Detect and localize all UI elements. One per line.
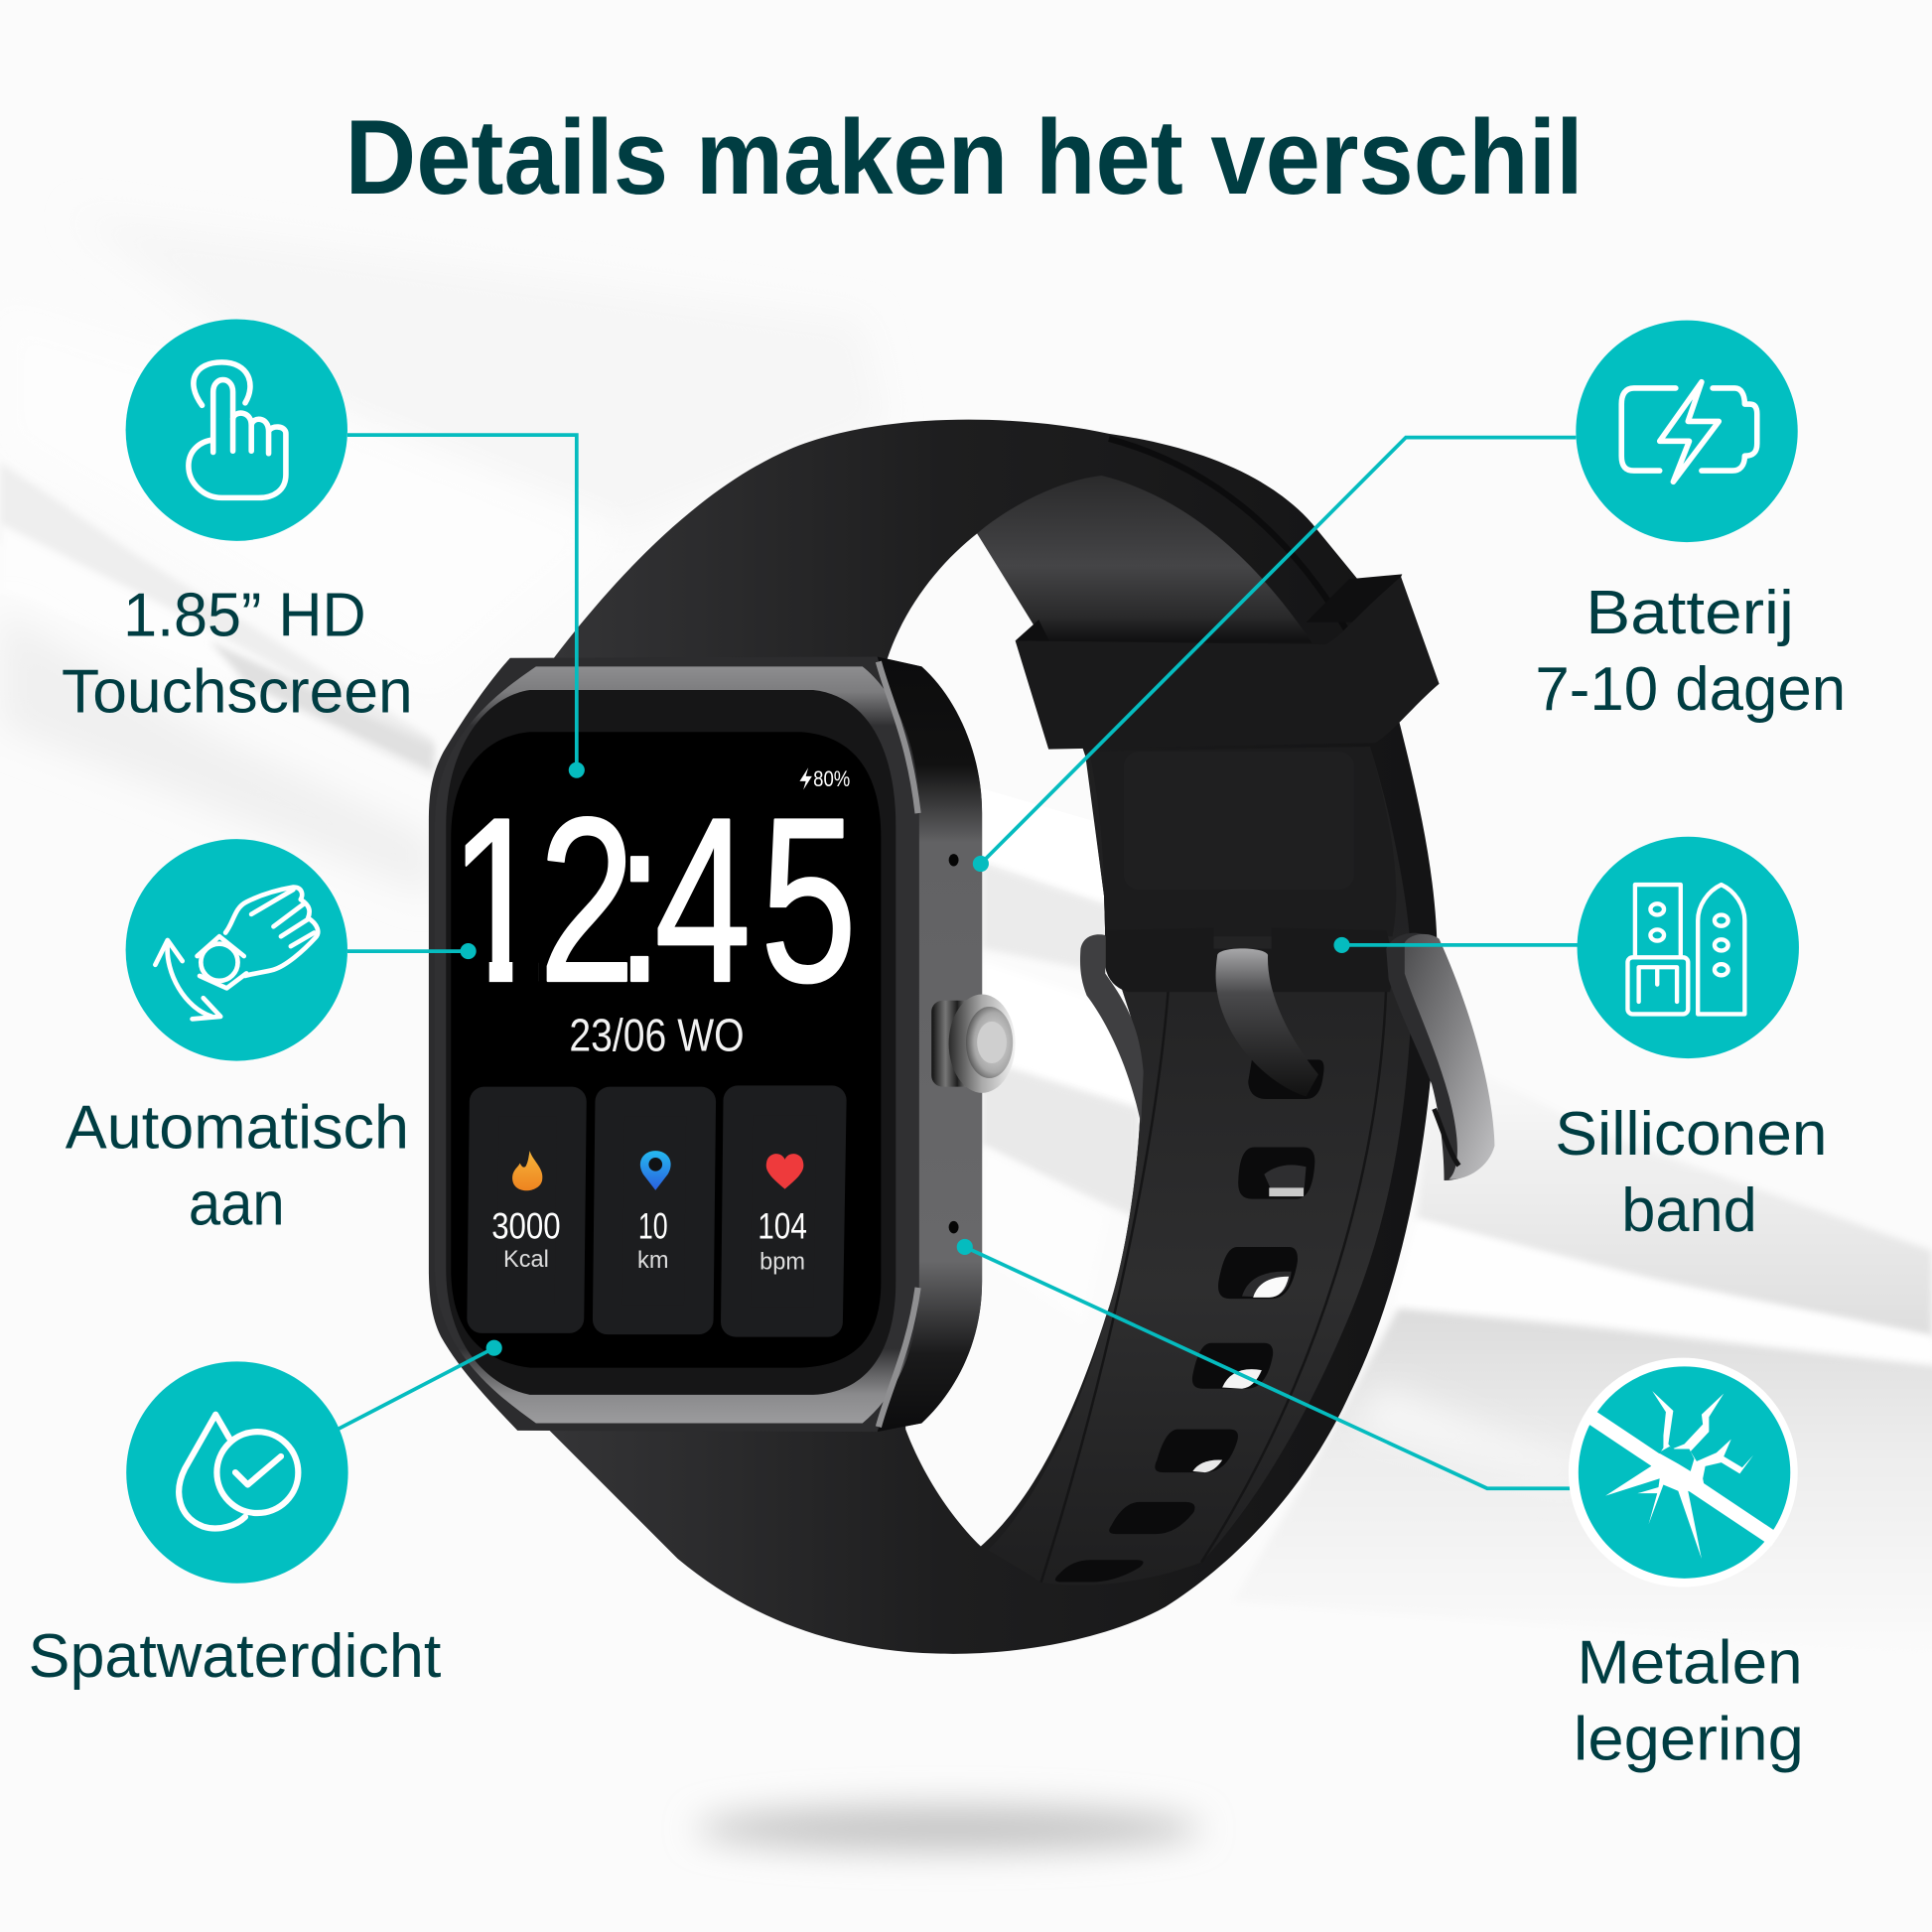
- feature: splash proof: [29, 1361, 441, 1691]
- label: Automatisch: [66, 1094, 409, 1163]
- feature: touchscreen: [62, 319, 413, 726]
- label: 1.85” HD: [123, 581, 366, 649]
- label: Touchscreen: [62, 657, 413, 726]
- label: Batterij: [1586, 579, 1794, 647]
- feature: metal alloy: [1569, 1358, 1804, 1773]
- icon: water drop with check: [179, 1415, 298, 1528]
- label: Metalen: [1578, 1628, 1803, 1697]
- card: heart rate: 104: [758, 1204, 807, 1246]
- battery status: 80%: [813, 766, 850, 791]
- badge: [1576, 321, 1798, 542]
- badge: [126, 319, 347, 541]
- badge: [1578, 837, 1799, 1058]
- badge: [126, 839, 347, 1061]
- keeper loop: [1016, 574, 1402, 642]
- button dots: [949, 854, 959, 1233]
- card: distance: km: [637, 1247, 668, 1273]
- icon: tapping hand: [189, 362, 286, 497]
- screen trim removing the foot of the 1: [454, 961, 538, 988]
- card: distance: 10: [638, 1204, 668, 1246]
- card: calories: 3000: [491, 1204, 561, 1246]
- silver highlights: [879, 661, 918, 1427]
- callout: automatic wake connector: [347, 943, 477, 959]
- card: distance: [608, 1102, 701, 1319]
- label: [62, 581, 413, 726]
- buckle right frame: [1386, 933, 1487, 1180]
- badge: [1569, 1358, 1798, 1587]
- title: Details maken het verschil: [345, 97, 1584, 216]
- label: legering: [1574, 1705, 1804, 1773]
- inner strap surface top: [977, 476, 1312, 643]
- label: aan: [189, 1171, 285, 1239]
- label: [1555, 1100, 1828, 1245]
- card: calories: Kcal: [503, 1246, 549, 1272]
- label: [1574, 1628, 1804, 1773]
- feature: battery: [1535, 321, 1846, 724]
- case body: [429, 656, 982, 1432]
- label: [66, 1094, 409, 1239]
- time: 12:45: [450, 768, 857, 1031]
- buckle left lug: [1080, 934, 1144, 1124]
- icon: strap and buckle: [1627, 885, 1744, 1014]
- bezel: [435, 666, 919, 1423]
- feature: silicone band: [1555, 837, 1828, 1245]
- date: 23/06 WO: [569, 1010, 745, 1061]
- callout: battery connector: [973, 438, 1576, 872]
- callout: splash proof connector: [338, 1340, 502, 1430]
- label: 7-10 dagen: [1535, 655, 1846, 724]
- callout: metal alloy connector: [957, 1239, 1570, 1488]
- floor shadow under watch: [696, 1806, 1201, 1851]
- label: band: [1621, 1176, 1757, 1245]
- icon: cracked glass crossed out: [1586, 1391, 1775, 1559]
- case right flank: [878, 656, 982, 1432]
- crown: [931, 995, 1016, 1093]
- watch illustration: [429, 420, 1494, 1654]
- darker upper panel: [1089, 747, 1396, 936]
- inner strap surface lower: [988, 747, 1413, 1586]
- strap holes: [1055, 1059, 1324, 1583]
- icon: battery with bolt: [1621, 382, 1757, 482]
- glass: [446, 690, 896, 1395]
- battery status: [799, 766, 850, 791]
- callout: silicone band connector: [1333, 937, 1579, 953]
- badge: [126, 1361, 348, 1584]
- callout: touchscreen connector: [347, 435, 585, 778]
- buckle bar: [1105, 928, 1396, 992]
- strap ring: [548, 420, 1438, 1654]
- feature: automatic on: [66, 839, 409, 1239]
- screen: [451, 732, 881, 1368]
- card: calories: [482, 1102, 572, 1318]
- label: Silliconen: [1555, 1100, 1828, 1169]
- label: Spatwaterdicht: [29, 1622, 441, 1691]
- card: heart rate: bpm: [759, 1248, 805, 1274]
- card: heart rate: [736, 1100, 832, 1322]
- icon: raised wrist with watch: [155, 888, 318, 1019]
- label: [1535, 579, 1846, 724]
- raised panel: [1124, 752, 1354, 890]
- buckle tang: [1216, 948, 1318, 1097]
